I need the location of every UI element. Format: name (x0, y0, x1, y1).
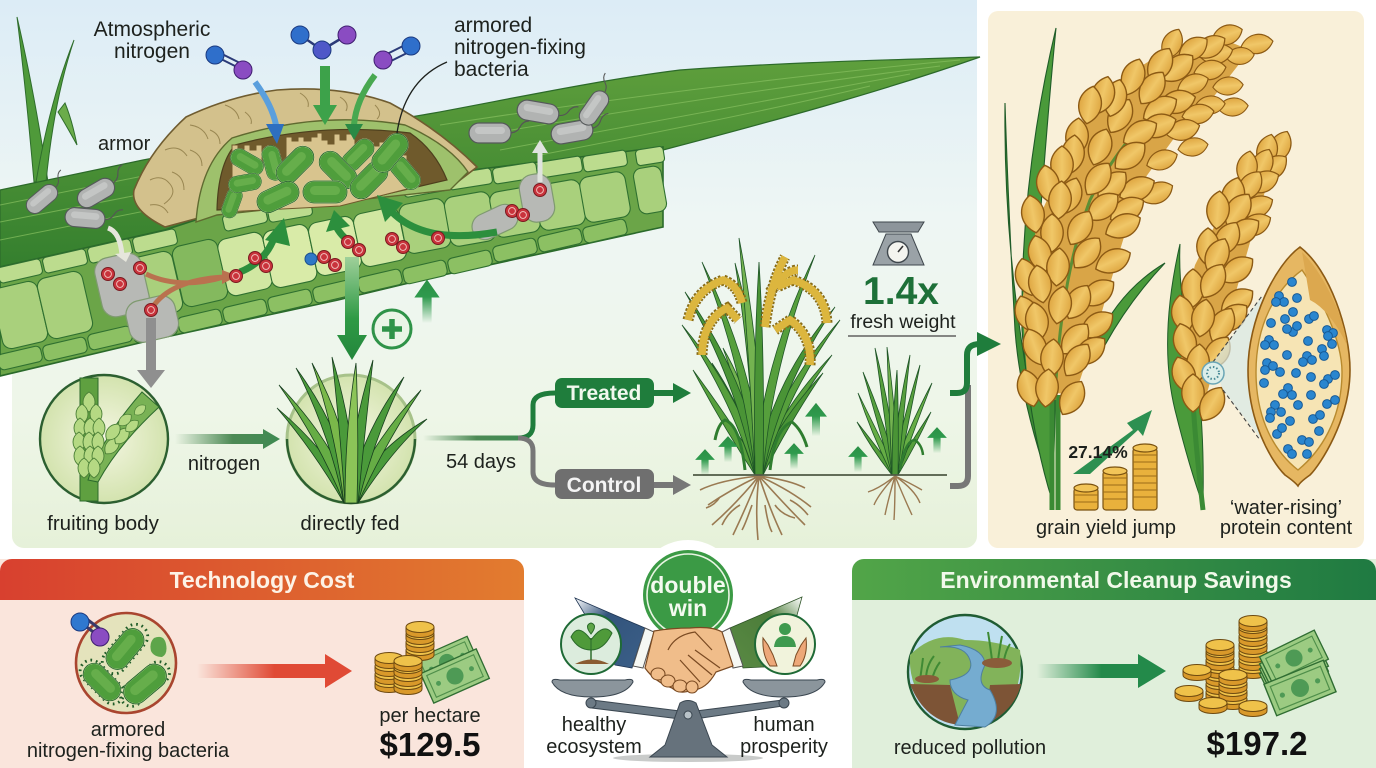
chart: coin stacks (1074, 444, 1157, 510)
armor dome (134, 89, 477, 227)
connector: to grain panel (950, 332, 1001, 486)
label: water-rising protein content: protein content (1220, 517, 1353, 539)
bacteria colony (219, 129, 424, 220)
label: armored nitrogen-fixing bacteria: nitrogen-fixing bacteria (27, 740, 230, 762)
label: armored nitrogen-fixing bacteria: bacteria (454, 58, 529, 81)
label: fresh weight: fresh weight (850, 311, 956, 333)
heading: Environmental Cleanup Savings (940, 567, 1292, 593)
label: reduced pollution: reduced pollution (894, 737, 1046, 759)
diagram: leaf cross-section (0, 57, 980, 376)
bacteria chamber with castle walls (217, 129, 447, 212)
label: water-rising protein content: ‘water-rising’ (1230, 497, 1342, 519)
roots (700, 476, 811, 540)
arrow: up green (414, 280, 440, 323)
growth arrows (695, 403, 947, 475)
stat: 1.4x: 1.4x (863, 270, 939, 313)
icon: people in hands circle (755, 614, 815, 674)
arrow: cost (197, 654, 352, 688)
icon: treated rice plant (682, 238, 840, 540)
icon: money (375, 622, 489, 703)
divider under fresh weight (848, 335, 956, 337)
ground line (693, 474, 947, 476)
nitrogen molecules in cells (102, 184, 546, 316)
icon: bacteria circle (71, 613, 176, 713)
label: fruiting body: fruiting body (47, 512, 160, 535)
icon: grass blades at top left (17, 17, 77, 182)
icon: plus circle (373, 310, 411, 348)
button: Treated: Treated (567, 382, 641, 405)
connector: 54 days branch (423, 393, 555, 485)
stat: 27.14%: 27.14% (1068, 442, 1128, 462)
label: healthy ecosystem: ecosystem (546, 736, 642, 758)
heading: Technology Cost (170, 567, 355, 593)
icon: double win centre: double (650, 572, 726, 598)
label: Atmospheric nitrogen: Atmospheric (94, 18, 210, 41)
icon: nitrogen molecule centre (291, 26, 356, 59)
panel: Technology Cost (0, 559, 524, 768)
panel: grain outcome (988, 11, 1364, 548)
label: 54 days: 54 days (446, 451, 516, 473)
icon: fruiting body circle (40, 375, 168, 503)
arrow: gray down to fruiting body (137, 318, 165, 388)
button: Control: Control (567, 474, 641, 497)
magnifier wedge (1202, 296, 1262, 440)
arrow: savings (1037, 654, 1166, 688)
icon: balance scale (552, 679, 825, 762)
label: nitrogen: nitrogen (188, 453, 260, 475)
label: human prosperity: prosperity (740, 736, 828, 758)
label: human prosperity: human (753, 714, 815, 736)
icon: weighing scale (873, 222, 924, 265)
arrow: nitrogen (175, 429, 280, 449)
stat: $197.2: $197.2 (1207, 725, 1307, 762)
label: armored nitrogen-fixing bacteria: nitrogen-fixing (454, 36, 586, 59)
icon: main rice panicle (1005, 20, 1275, 510)
icon: river circle (908, 615, 1022, 729)
icon: nitrogen molecule left (206, 46, 252, 79)
icon: directly fed plant (277, 357, 427, 503)
icon: double win centre: win (668, 595, 707, 621)
icon: plant circle (561, 614, 621, 674)
button: Control (555, 469, 654, 499)
leaf cell layer (0, 146, 668, 376)
gray bacteria on leaf (22, 73, 622, 231)
button: Treated (555, 378, 654, 408)
leader line to bacteria (397, 62, 447, 133)
icon: nitrogen molecule right (374, 37, 420, 69)
label: Atmospheric nitrogen: nitrogen (114, 40, 190, 63)
icon: double win centre (636, 540, 740, 644)
arrow: nitrogen down to directly fed (337, 257, 367, 360)
icon: second rice panicle (1167, 127, 1296, 510)
nitrogen transport arrows inside leaf (108, 140, 548, 308)
arrow: green nitrogen influx right (345, 75, 375, 140)
arrow: treated to plant (654, 383, 691, 403)
leaf blade (0, 57, 980, 268)
label: per hectare: per hectare (379, 705, 481, 727)
arrow: yield increase (1073, 410, 1152, 474)
arrow: blue nitrogen influx (255, 82, 284, 144)
arrow: control to plant (654, 475, 691, 495)
label: directly fed: directly fed (300, 512, 400, 535)
label: armored nitrogen-fixing bacteria: armored (454, 14, 532, 37)
panicles (688, 257, 827, 365)
label: grain yield jump: grain yield jump (1036, 517, 1176, 539)
stat: $129.5: $129.5 (380, 726, 480, 763)
arrow: green nitrogen influx centre (313, 66, 337, 125)
label: healthy ecosystem: healthy (562, 714, 626, 736)
icon: sleeves and handshake (575, 597, 802, 693)
panel: Environmental Cleanup Savings (852, 559, 1376, 768)
icon: control rice plant (857, 347, 932, 520)
panel: process background (0, 0, 977, 548)
icon: money pile (1175, 616, 1336, 716)
label: armored nitrogen-fixing bacteria: armored (91, 719, 165, 741)
icon: grain cross-section with protein (1248, 247, 1350, 486)
label: armor: armor (98, 133, 151, 155)
